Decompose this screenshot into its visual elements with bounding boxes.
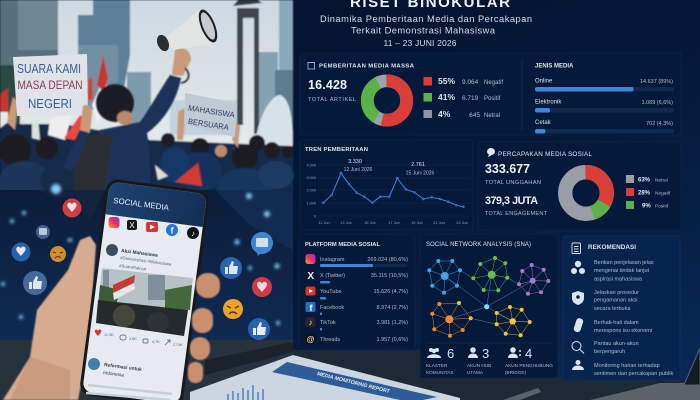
row: threads: @ [306, 335, 315, 344]
line chart: 2.000 [306, 188, 316, 192]
row: facebook: Facebook [320, 305, 344, 311]
row: tiktok [306, 317, 408, 330]
icon: angry emoji right [223, 299, 243, 319]
line chart: 3.000 [306, 176, 316, 180]
row: x: 35.115 (10,5%) [371, 273, 408, 279]
icon: red heart right [252, 277, 272, 297]
subtitle: Dinamika Pemberitaan Media dan Percakapan [320, 14, 532, 24]
item 5: sentimen dan percakapan publik [594, 371, 673, 377]
cluster: green [471, 256, 509, 292]
legend: negative: Negatif [655, 190, 671, 196]
lower background with network glow [0, 184, 293, 400]
heading: PERCAPAKAN MEDIA SOSIAL [498, 151, 592, 158]
stat: hub accounts: UTAMA [467, 370, 484, 375]
main protester with raised arm [63, 48, 191, 190]
peak annotation 1: 3.330 [348, 159, 362, 165]
legend: negative: 28% [638, 190, 651, 196]
item 4 [572, 341, 639, 355]
bar: print [535, 120, 674, 134]
panel: news trend [300, 140, 473, 230]
legend: neutral: Netral [655, 178, 668, 184]
post reactions: 3,6K [129, 337, 137, 341]
stat: bridge accounts: (BRIDGE) [505, 370, 527, 375]
post reactions: 11,3K [104, 333, 114, 337]
donut: sentiment [367, 81, 407, 120]
icon: blue heart: ♥ [15, 245, 27, 260]
floating reaction icons [12, 198, 273, 340]
heading: PLATFORM MEDIA SOSIAL [305, 242, 380, 248]
peak annotation 2: 15 Juni 2026 [406, 170, 435, 176]
post 1 author: #SuaraRakyat [119, 263, 147, 272]
line chart: 4.000 [306, 164, 316, 168]
icon: red heart [62, 198, 82, 218]
phone header title: SOCIAL MEDIA [113, 196, 170, 212]
app icon row: X [129, 221, 135, 230]
icon: thumbs up [23, 271, 47, 295]
item 4: Pantau akun-akun [594, 341, 639, 347]
panel: social network analysis [420, 234, 558, 378]
item 3: merespons isu ekonomi [594, 328, 652, 334]
peak annotation 2 [406, 162, 435, 176]
legend: neutral: 645 [469, 112, 480, 119]
subtitle: 11 – 23 JUNI 2026 [384, 38, 457, 48]
line chart: 15 Jun [364, 221, 376, 225]
row: facebook: f [309, 303, 313, 314]
heading: TREN PEMBERITAAN [305, 147, 368, 153]
row: facebook: 8.974 (2,7%) [376, 305, 408, 311]
row: x: X (Twitter) [320, 273, 345, 279]
laptop [590, 348, 700, 400]
app icon row: ♪ [191, 229, 195, 238]
post reactions: 27,9K [173, 343, 183, 347]
app icon row [108, 217, 199, 239]
item 1: mengenai tindak lanjut [594, 268, 650, 274]
phone hand: fingers [188, 273, 220, 383]
legend: positive: Positif [655, 204, 669, 210]
post 1 author: #Demonstrasi #Mahasiswa [120, 255, 172, 267]
post 2: Indonesia [103, 370, 124, 379]
row: x [307, 271, 408, 284]
smartphone [79, 178, 210, 400]
line chart: 13 Jun [340, 221, 352, 225]
cluster: orange [430, 301, 473, 338]
row: instagram [306, 254, 408, 267]
stat: communities [426, 346, 454, 375]
item 3: Berhati-hati dalam [594, 320, 639, 326]
bar: online [535, 78, 674, 92]
line chart [306, 164, 470, 225]
line chart: 19 Jun [411, 221, 423, 225]
donut: conversation sentiment [565, 172, 607, 214]
sign: mahasiswa bersuara [184, 93, 237, 137]
bar: online: Online [535, 78, 553, 84]
row: threads: 1.957 (0,6%) [376, 337, 408, 343]
stat: hub accounts: AKUN HUB [467, 363, 491, 368]
row: youtube: 15.626 (4,7%) [373, 289, 408, 295]
bar: print: Cetak [535, 120, 552, 126]
panel: recommendations [563, 236, 680, 380]
item 2: Jelaskan prosedur [594, 290, 639, 296]
icon: comment [36, 225, 50, 239]
legend: negative: 55% [438, 76, 455, 86]
row: x: X [307, 271, 314, 282]
bar: electronic [535, 100, 674, 112]
line chart: 23 Jun [456, 221, 468, 225]
legend: negative [626, 188, 671, 196]
subtitle: Terkait Demonstrasi Mahasiswa [351, 26, 496, 36]
item 1: aspirasi mahasiswa [594, 276, 643, 282]
legend: positive: 6.719 [462, 95, 479, 102]
engagement label: TOTAL ENGAGEMENT [485, 211, 548, 217]
post reactions: 4,7K [152, 340, 160, 344]
bar: online: 14.637 (89%) [640, 79, 673, 85]
panel: social platforms [299, 234, 415, 348]
bar: electronic: 1.089 (6,6%) [642, 100, 673, 106]
panel: media coverage [300, 53, 681, 135]
legend: negative: 9.064 [462, 79, 479, 86]
app icon row: f [170, 226, 174, 236]
legend: neutral: Netral [484, 113, 500, 119]
row: instagram: Instagram [320, 257, 345, 263]
row: youtube [306, 286, 408, 300]
legend: positive [626, 201, 669, 210]
posts label: TOTAL UNGGAHAN [485, 180, 541, 186]
post 2: Reformasi untuk [104, 362, 142, 373]
sign: suara kami: NEGERI [28, 96, 72, 111]
heading: PEMBERITAAN MEDIA MASSA [319, 64, 415, 70]
post reactions [94, 329, 183, 347]
row: threads: Threads [320, 337, 340, 343]
legend: neutral [424, 109, 500, 119]
heading: SOCIAL NETWORK ANALYSIS (SNA) [426, 242, 531, 248]
cluster: blue [427, 259, 462, 295]
legend: positive: 9% [642, 204, 651, 210]
report document [190, 355, 460, 400]
line chart: 11 Jun [318, 221, 330, 225]
peak annotation 1 [344, 159, 373, 173]
table surface [293, 350, 700, 400]
total articles: 16.428 [308, 78, 347, 92]
central bridge node [484, 304, 489, 309]
post 2 [86, 358, 172, 400]
post reactions: ♥ [94, 329, 102, 339]
line chart: 0 [314, 214, 316, 218]
total posts: 333.677 [485, 162, 530, 176]
legend: negative [424, 76, 503, 86]
stat: communities: KLASTER [426, 363, 448, 368]
item 5 [572, 360, 673, 377]
stat: hub accounts [467, 346, 491, 375]
legend: neutral: 4% [438, 109, 451, 119]
pen [503, 388, 541, 400]
line chart: 1.000 [306, 202, 316, 206]
post photo [96, 268, 193, 336]
phone hand: palm and thumb [3, 236, 96, 400]
sign: suara kami: MASA DEPAN [18, 78, 82, 92]
report document: MEDIA MONITORING REPORT [316, 371, 391, 395]
legend: negative: Negatif [484, 80, 503, 86]
cluster: yellow [495, 305, 532, 337]
bar: electronic: Elektronik [535, 100, 562, 106]
stat: communities: KOMUNITAS [426, 370, 454, 375]
sign: mahasiswa bersuara: MAHASISWA [187, 103, 236, 120]
stat: hub accounts: 3 [482, 346, 489, 361]
icon: red heart right: ♥ [256, 280, 268, 296]
post 1 author [106, 244, 172, 272]
network graph [427, 256, 550, 338]
item 1: Berikan penjelasan jelas [594, 260, 654, 266]
legend: positive: Positif [484, 96, 501, 102]
subtitle [320, 14, 532, 48]
row: tiktok: TikTok [320, 320, 336, 326]
item 2: pengamanan aksi [594, 298, 637, 304]
heading: media types: JENIS MEDIA [535, 64, 574, 70]
item 1 [571, 260, 654, 282]
row: threads [306, 334, 408, 344]
sign: suara kami: SUARA KAMI [17, 61, 81, 76]
peak annotation 1: 12 Juni 2026 [344, 167, 373, 173]
stat: bridge accounts: 4 [525, 346, 532, 361]
icon: blue heart [12, 242, 30, 262]
icon: angry emoji [50, 246, 66, 262]
row: tiktok: 3.981 (1,2%) [376, 320, 408, 326]
icon: megaphone [155, 7, 221, 53]
legend: positive: 41% [438, 92, 455, 102]
item 2 [572, 290, 639, 312]
row: instagram: 269.024 (80,6%) [367, 257, 408, 263]
heading: REKOMENDASI [588, 244, 636, 251]
item 3 [573, 317, 652, 334]
legend: positive [424, 92, 501, 102]
line chart: 17 Jun [388, 221, 400, 225]
icon: comment bubble [251, 232, 273, 256]
sign: mahasiswa bersuara: BERSUARA [187, 117, 230, 132]
total engagement: 379,3 JUTA [485, 195, 538, 207]
stat: bridge accounts: AKUN PENGHUBUNG [505, 363, 553, 368]
total label: TOTAL ARTIKEL [308, 97, 356, 103]
bar: print: 702 (4,3%) [646, 121, 673, 127]
icon: red heart: ♥ [66, 201, 78, 216]
sign: suara kami [13, 54, 88, 116]
item 2: secara terbuka [594, 306, 631, 312]
icon: thumbs up right [220, 257, 242, 279]
icon: newspaper [308, 62, 314, 69]
post 1 author: Aksi Mahasiswa [121, 248, 158, 259]
item 4: berpengaruh [594, 349, 625, 355]
item 5: Monitoring harian terhadap [594, 363, 660, 369]
legend: neutral [626, 175, 668, 184]
icon: clipboard [572, 243, 580, 254]
icon: chat [487, 148, 495, 157]
legend: neutral: 63% [638, 178, 651, 184]
icon: thumbs up lower [248, 318, 270, 340]
peak annotation 2: 2.761 [411, 162, 425, 168]
stat: communities: 6 [447, 346, 454, 361]
row: facebook [306, 302, 408, 315]
cluster: purple [517, 263, 550, 296]
stat: bridge accounts [505, 346, 553, 375]
line chart: 21 Jun [433, 221, 445, 225]
background photo: protest scene [0, 0, 294, 208]
row: youtube: YouTube [320, 289, 342, 295]
panel: social media conversation [478, 142, 681, 230]
row: tiktok: ♪ [308, 318, 312, 327]
